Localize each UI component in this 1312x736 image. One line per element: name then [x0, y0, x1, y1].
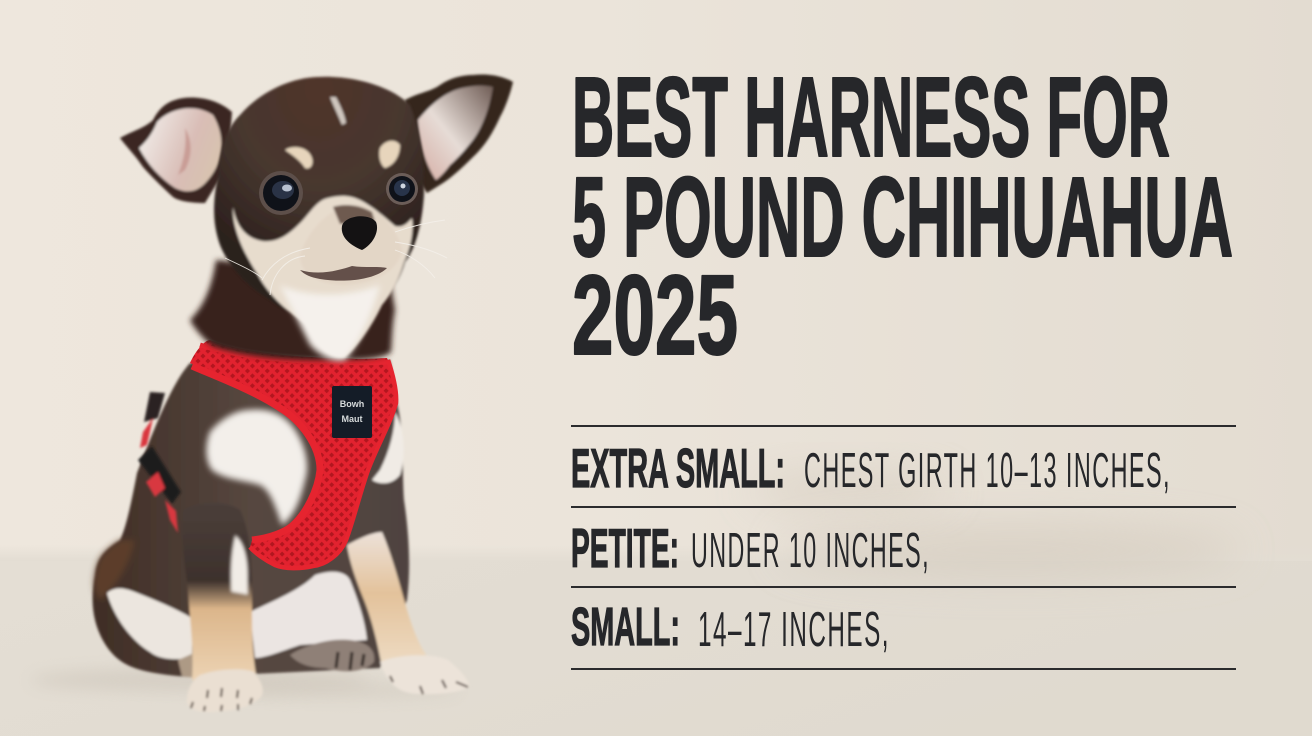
muzzle snout — [300, 205, 402, 285]
harness brand tag: Maut — [342, 414, 362, 424]
front right leg — [347, 532, 430, 668]
harness brand tag: Bowh — [340, 399, 364, 409]
front left leg — [182, 502, 256, 680]
row: petite: PETITE: — [571, 517, 679, 579]
row: extra small: EXTRA SMALL: — [571, 437, 785, 499]
back paw — [290, 640, 374, 671]
nose and mouth — [300, 216, 387, 281]
row: small: 14–17 INCHES, — [698, 603, 890, 657]
white haunch — [107, 588, 192, 659]
title: 2025 — [572, 252, 738, 378]
muzzle and cheeks — [233, 196, 413, 358]
red harness — [138, 340, 397, 569]
brown rump — [94, 540, 135, 600]
row: small: SMALL: — [571, 597, 680, 657]
dog body — [93, 360, 470, 712]
eyes — [259, 171, 418, 215]
front left paw — [187, 669, 263, 712]
harness hem — [192, 366, 320, 540]
row: petite: UNDER 10 INCHES, — [691, 524, 930, 578]
row: small — [571, 586, 1236, 670]
size list — [571, 425, 1236, 670]
white belly — [250, 572, 367, 658]
white right chest patch — [372, 412, 404, 483]
right ear — [405, 74, 513, 193]
eyebrow spots — [285, 147, 313, 168]
title — [572, 54, 1233, 378]
front right paw — [380, 655, 470, 694]
mesh vest — [190, 340, 397, 569]
dog neck — [190, 260, 395, 360]
white chest fur — [206, 410, 307, 525]
left ear — [120, 98, 232, 203]
photo: chihuahua puppy wearing red harness — [93, 74, 513, 712]
row: petite — [571, 506, 1236, 579]
forehead streak — [330, 97, 346, 125]
row: extra small — [571, 425, 1236, 499]
dog head — [214, 77, 424, 360]
whiskers — [225, 220, 447, 295]
white chin and chest — [280, 285, 380, 360]
harness brand tag — [332, 386, 372, 438]
side straps and buckle — [138, 392, 181, 533]
